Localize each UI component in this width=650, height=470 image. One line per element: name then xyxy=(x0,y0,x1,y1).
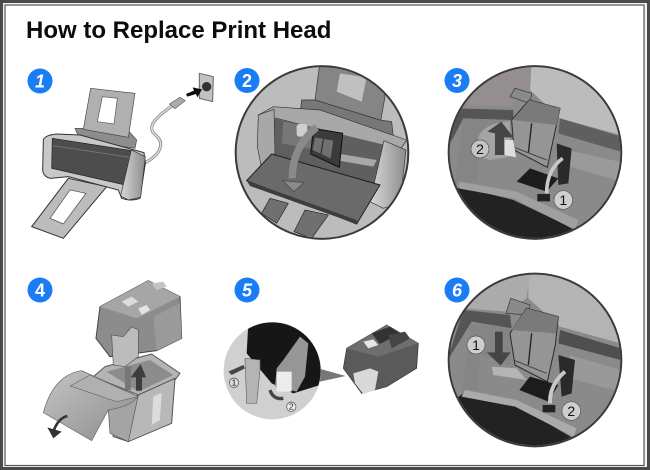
callout: 1 xyxy=(554,191,573,209)
panel: step 1 printer and power cord xyxy=(32,73,213,238)
icon: wall outlet xyxy=(199,73,213,102)
arrow: press down xyxy=(487,332,511,366)
badge 5: 5 xyxy=(242,280,253,300)
rear paper tray xyxy=(75,88,137,148)
magnified detail xyxy=(224,320,325,419)
badge 1: 1 xyxy=(35,72,45,92)
badge 3: 3 xyxy=(452,71,462,91)
paper tray lower xyxy=(262,198,328,238)
badge 1 xyxy=(28,68,52,94)
printer body xyxy=(43,134,145,200)
badge 4: 4 xyxy=(35,280,45,300)
callout: 2 xyxy=(562,402,581,420)
package box xyxy=(93,354,180,442)
background xyxy=(450,67,620,224)
power cord xyxy=(145,97,185,163)
dark front xyxy=(458,393,572,446)
title: How to Replace Print Head xyxy=(26,17,331,44)
callout: 1: 1 xyxy=(559,192,567,208)
panel: step 3 release lever and lift head xyxy=(447,63,627,247)
badge 3 xyxy=(444,68,470,93)
printer interior xyxy=(257,107,407,208)
badge 6: 6 xyxy=(452,280,463,300)
badge 5 xyxy=(234,278,260,302)
panel: step 5 remove protective caps xyxy=(224,320,418,419)
callout: 1: 1 xyxy=(472,337,480,353)
callout: 2 xyxy=(287,402,296,412)
callout: 1 xyxy=(467,336,485,354)
arrow: open cover xyxy=(283,127,317,192)
front output tray xyxy=(32,178,107,238)
callout: 1 xyxy=(229,378,239,388)
callout: 2: 2 xyxy=(567,403,575,419)
open front door xyxy=(247,154,380,224)
panel: step 2 open printer cover xyxy=(236,66,408,239)
badge 6 xyxy=(444,278,470,302)
callout: 2: 2 xyxy=(289,402,294,412)
rear paper tray xyxy=(300,67,393,137)
lever xyxy=(517,143,572,201)
print head xyxy=(510,88,560,167)
print head xyxy=(297,124,343,167)
badge 2: 2 xyxy=(242,71,252,91)
arrow: lift up xyxy=(131,364,146,391)
background xyxy=(450,274,620,436)
print head xyxy=(96,281,182,390)
print head xyxy=(506,298,558,382)
callout: 2: 2 xyxy=(476,141,484,157)
dark front xyxy=(458,187,573,238)
arrow: lift up xyxy=(487,122,513,155)
badge 4 xyxy=(28,278,52,302)
callout: 2 xyxy=(471,140,489,158)
tape flap xyxy=(43,371,138,441)
panel: step 4 remove head from package xyxy=(43,281,182,442)
badge 2 xyxy=(234,68,260,93)
arrow: peel tape xyxy=(47,416,67,438)
print head small xyxy=(343,325,418,394)
pointer wedge xyxy=(318,368,346,382)
arrow: plug in xyxy=(186,87,202,97)
panel: step 6 install head and close lever xyxy=(447,272,627,455)
lever xyxy=(519,355,575,412)
callout: 1: 1 xyxy=(232,378,237,388)
